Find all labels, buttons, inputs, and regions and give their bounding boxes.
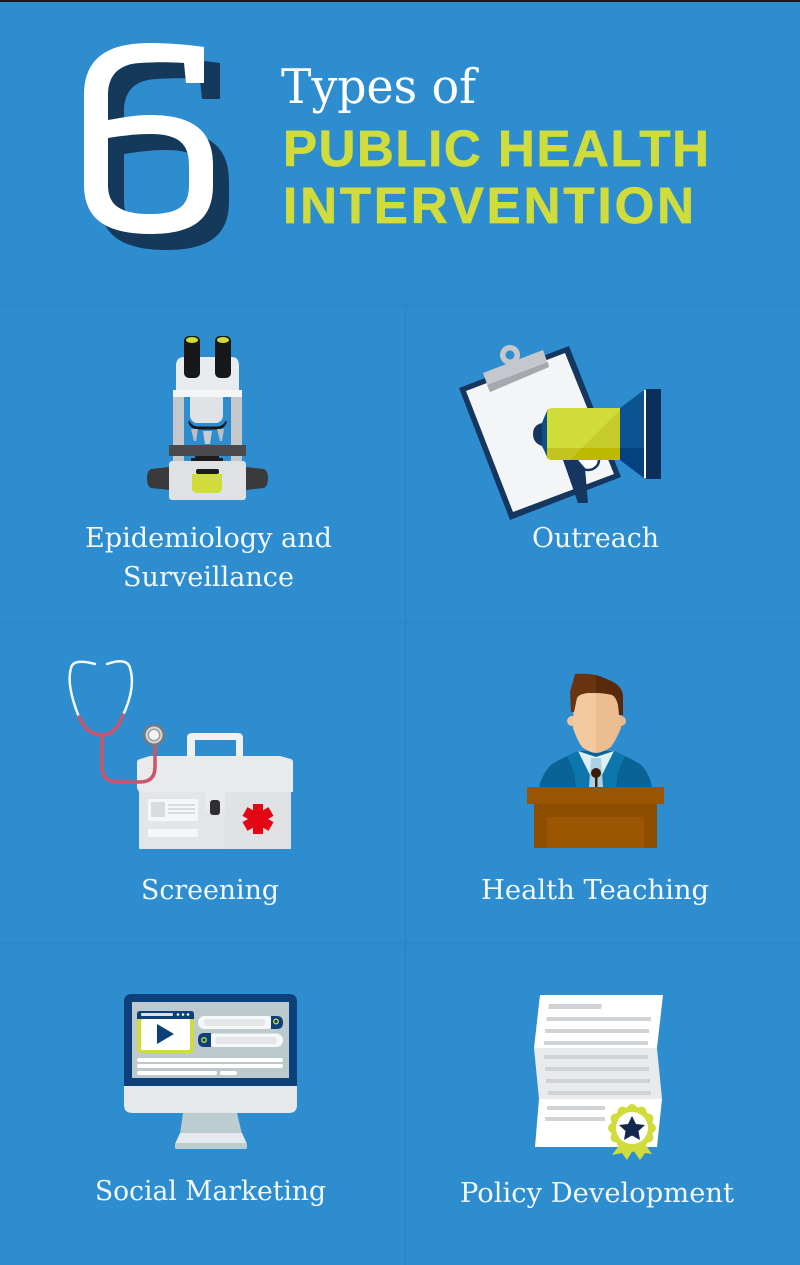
icon: speaker at podium — [527, 674, 664, 848]
heading: INTERVENTION — [283, 177, 694, 234]
label: Epidemiology and — [85, 522, 332, 554]
icon: medical case — [137, 733, 293, 849]
panel: outreach — [459, 345, 661, 554]
heading: Types of — [281, 59, 479, 115]
panel: social marketing — [95, 994, 326, 1207]
panel: health teaching — [481, 674, 709, 906]
icon: microscope — [147, 336, 268, 500]
icon: award seal — [608, 1104, 656, 1160]
icon: stethoscope — [70, 661, 165, 782]
label: Social Marketing — [95, 1175, 326, 1207]
panel: policy development — [460, 995, 734, 1209]
panel: epidemiology and surveillance — [85, 336, 332, 593]
icon: clipboard and megaphone — [459, 345, 661, 520]
icon: certificate document — [534, 995, 663, 1160]
label continuation: Surveillance — [123, 561, 294, 593]
title numeral 6 — [84, 43, 229, 250]
label: Policy Development — [460, 1177, 734, 1209]
heading — [281, 59, 709, 234]
label: Health Teaching — [481, 874, 709, 906]
heading: PUBLIC HEALTH — [283, 120, 709, 177]
label: Outreach — [532, 522, 659, 554]
icon: desktop computer — [124, 994, 297, 1149]
label: Screening — [141, 874, 279, 906]
panel: screening — [70, 661, 293, 906]
